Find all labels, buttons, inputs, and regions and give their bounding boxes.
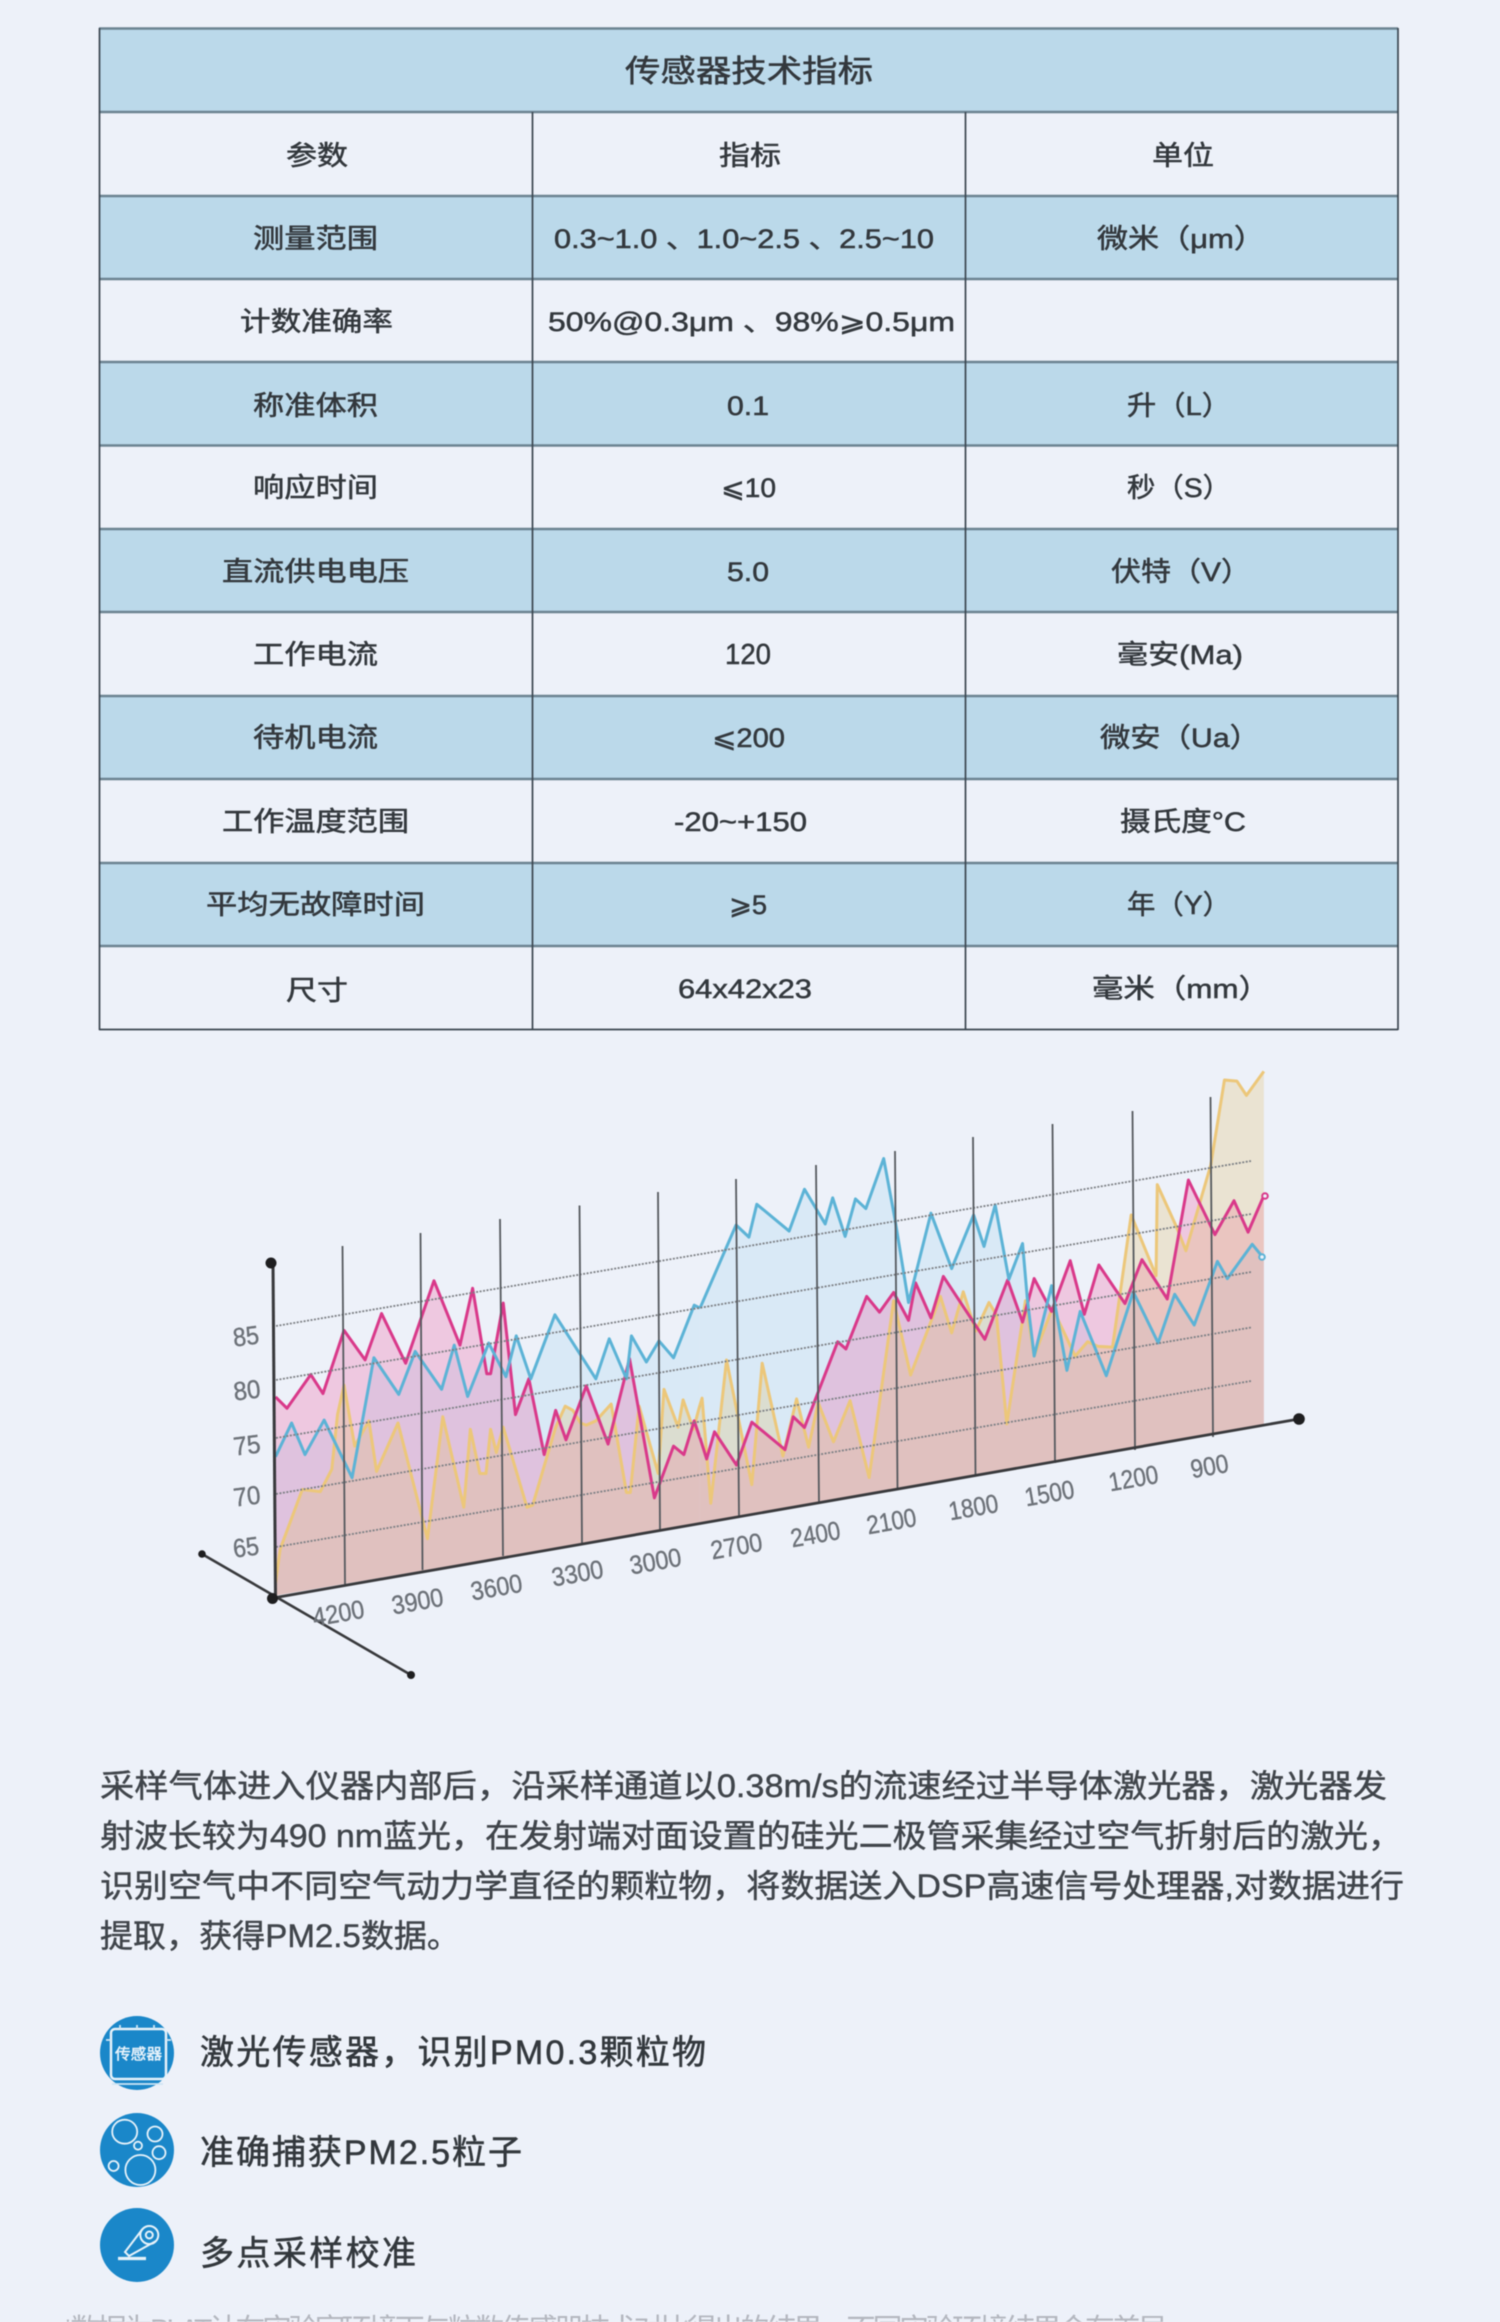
row: working current: 毫安(Ma) <box>1117 640 1243 670</box>
feature text: laser sensor: 激光传感器，识别PM0.3颗粒物 <box>200 2034 706 2072</box>
row: response time: ⩽10 <box>721 473 776 503</box>
chart: 3D perspective area line chart <box>198 1071 1305 1679</box>
x axis labels: 3900 <box>389 1582 446 1620</box>
text block: sampling description: 提取，获得PM2.5数据。 <box>100 1918 460 1954</box>
row: operating temperature: 摄氏度°C <box>1120 807 1246 837</box>
row: measuring range <box>253 224 1265 254</box>
row: dimensions: 尺寸 <box>286 976 348 1006</box>
row: DC supply voltage: 伏特（V） <box>1111 557 1251 587</box>
chart axes <box>198 1258 1305 1679</box>
text block: sampling description: 射波长较为490 nm蓝光，在发射端对面设置的硅光二极管采集经过空气折射后的激光， <box>100 1818 1402 1854</box>
row: operating temperature <box>222 807 1246 837</box>
vertical grid lines <box>342 1097 1213 1584</box>
row: working current <box>253 639 1243 671</box>
row: standby current: 待机电流 <box>253 723 378 753</box>
y axis labels: 85 <box>231 1320 261 1353</box>
text block: sampling description <box>100 1768 1404 1954</box>
row: standby current: 微安（Ua） <box>1100 723 1260 753</box>
chart areas and lines, left portion <box>276 1281 700 1596</box>
series end markers <box>1259 1193 1268 1260</box>
row: mean time between failures: ⩾5 <box>729 890 767 920</box>
row: nominal volume: 称准体积 <box>253 391 378 421</box>
column headers: 单位 <box>1152 141 1214 171</box>
column headers <box>286 141 1214 171</box>
x axis labels: 2700 <box>708 1527 765 1565</box>
row: nominal volume: 升（L） <box>1127 391 1231 421</box>
row: operating temperature: 工作温度范围 <box>222 807 409 837</box>
y axis labels: 65 <box>231 1531 261 1564</box>
y axis labels: 80 <box>232 1374 262 1407</box>
x axis labels: 3300 <box>549 1554 606 1592</box>
row: mean time between failures: 年（Y） <box>1127 890 1231 920</box>
row: dimensions: 毫米（mm） <box>1092 974 1270 1004</box>
x axis labels: 1800 <box>946 1488 1001 1526</box>
row: measuring range: 0.3~1.0 、1.0~2.5 、2.5~10 <box>554 224 934 254</box>
icon: sensor chip: 传感器 <box>115 2046 162 2063</box>
x axis labels: 900 <box>1188 1448 1231 1484</box>
row: mean time between failures: 平均无故障时间 <box>206 890 425 920</box>
row: measuring range: 测量范围 <box>253 224 378 254</box>
chart areas and lines, right portion <box>700 1071 1264 1524</box>
row: working current: 120 <box>725 639 771 671</box>
panel: sensor specification table <box>99 28 1398 1030</box>
row: working current: 工作电流 <box>253 640 378 670</box>
x axis labels: 3600 <box>468 1568 525 1606</box>
row: DC supply voltage: 5.0 <box>727 557 769 587</box>
row: operating temperature: -20~+150 <box>674 807 807 837</box>
text block: sampling description: 采样气体进入仪器内部后，沿采样通道以0.38m/s的流速经过半导体激光器，激光器发 <box>100 1768 1387 1804</box>
feature list <box>100 2016 706 2282</box>
table grid <box>99 28 1398 1030</box>
y axis labels: 75 <box>232 1429 262 1462</box>
icon: sensor chip <box>100 2016 174 2090</box>
row: dimensions: 64x42x23 <box>678 974 812 1004</box>
feature text: multi-point calibration: 多点采样校准 <box>200 2235 416 2273</box>
row: dimensions <box>286 974 1270 1006</box>
x axis labels <box>310 1448 1231 1632</box>
y axis labels: 70 <box>232 1480 262 1513</box>
row: response time <box>253 473 1231 503</box>
text block: sampling description: 识别空气中不同空气动力学直径的颗粒物，将数据送入DSP高速信号处理器,对数据进行 <box>100 1868 1404 1904</box>
row: response time: 秒（S） <box>1127 473 1231 503</box>
x axis labels: 1200 <box>1106 1459 1161 1497</box>
row: nominal volume: 0.1 <box>727 391 769 421</box>
x axis labels: 2400 <box>788 1515 843 1553</box>
horizontal dotted grid <box>276 1161 1251 1547</box>
icon: calibration probe <box>100 2208 174 2282</box>
x axis labels: 3000 <box>627 1542 684 1580</box>
row: nominal volume <box>253 391 1231 421</box>
x axis labels: 4200 <box>310 1594 367 1632</box>
row: counting accuracy: 计数准确率 <box>240 307 393 337</box>
row: standby current <box>253 723 1260 753</box>
row: response time: 响应时间 <box>253 473 378 503</box>
icon: particles <box>100 2113 174 2187</box>
row: mean time between failures <box>206 890 1231 920</box>
y axis labels <box>231 1320 262 1564</box>
row: DC supply voltage <box>222 557 1251 587</box>
column headers: 参数 <box>286 141 348 171</box>
row: counting accuracy: 50%@0.3μm 、98%⩾0.5μm <box>548 307 955 337</box>
row: standby current: ⩽200 <box>712 723 785 753</box>
table title: 传感器技术指标 <box>625 54 873 89</box>
x axis labels: 2100 <box>864 1502 919 1540</box>
feature text: capture PM2.5: 准确捕获PM2.5粒子 <box>200 2134 522 2172</box>
table row bands <box>100 28 1398 946</box>
column headers: 指标 <box>719 141 781 171</box>
x axis labels: 1500 <box>1022 1474 1077 1512</box>
row: measuring range: 微米（μm） <box>1097 224 1265 254</box>
row: counting accuracy <box>240 307 955 337</box>
row: DC supply voltage: 直流供电电压 <box>222 557 409 587</box>
